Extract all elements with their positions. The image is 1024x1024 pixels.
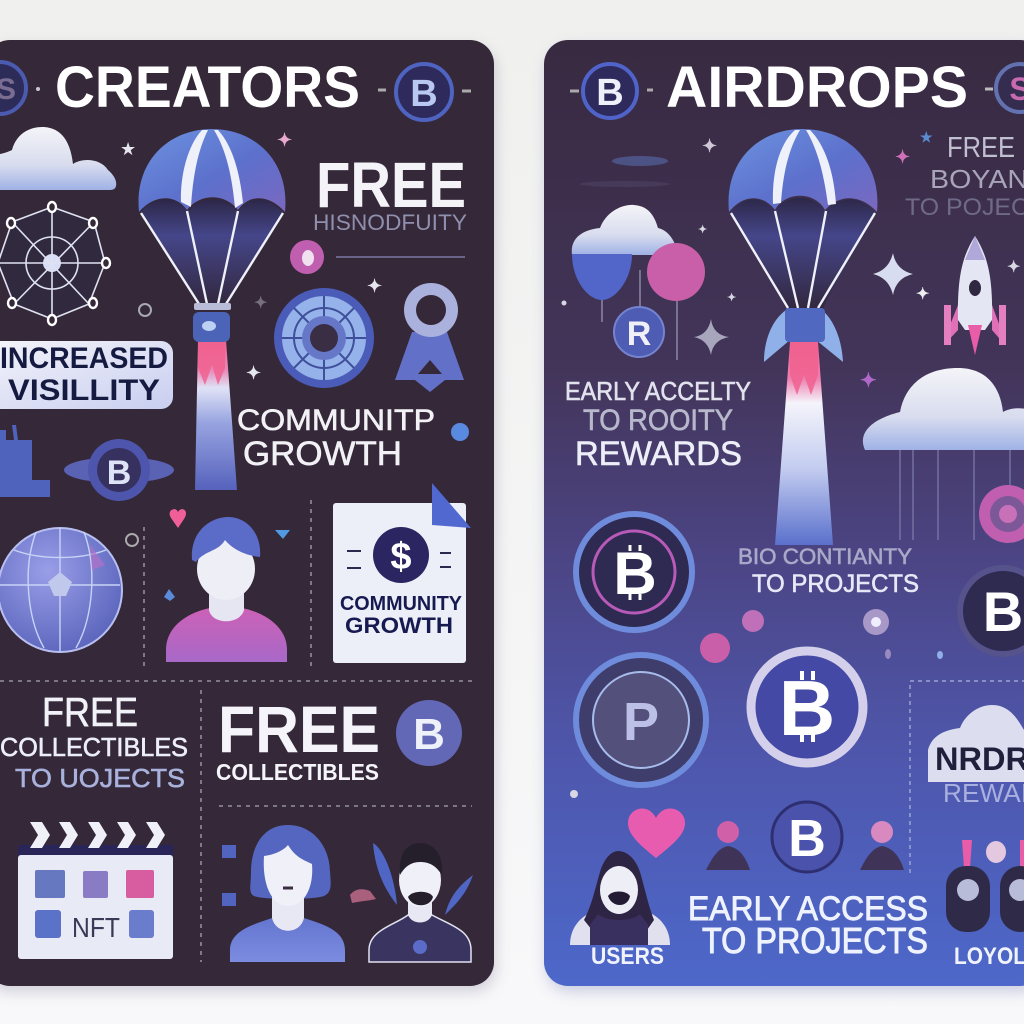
text: early access to rewards: EARLY ACCELTY <box>565 376 751 406</box>
decorative sparkles: airdrops: ✦ <box>1007 259 1020 276</box>
icon: cloud with balloons <box>572 205 705 360</box>
icon: coin left top <box>0 62 40 114</box>
icon: coin B top right panel <box>570 64 653 118</box>
text: community growth: GROWTH <box>243 435 402 473</box>
icon: planet coin: B <box>107 454 131 492</box>
icon: parachute airdrops <box>729 129 877 545</box>
icon: pawn left <box>706 821 750 870</box>
icon: pawn right <box>860 821 904 870</box>
dashed dividers: creators <box>0 500 474 962</box>
icon: star large <box>873 253 913 295</box>
text: bio community to projects <box>738 544 919 598</box>
text: free collectibles to projects: COLLECTIBLES <box>0 732 188 762</box>
tail <box>775 342 833 545</box>
icon: coin B top right panel: B <box>596 72 624 114</box>
icon: glass coin <box>576 655 706 785</box>
icon: coin small: R <box>627 315 651 353</box>
icon: pink circle <box>290 240 465 274</box>
icon: globe <box>0 528 122 652</box>
icon: coin bottom <box>772 802 842 872</box>
decorative sparkles: airdrops: ✦ <box>895 147 910 167</box>
text: free collectibles to projects: FREE <box>42 689 138 735</box>
icon: glass coin: P <box>623 692 659 752</box>
text: community growth <box>237 404 435 473</box>
decorative sparkles: airdrops: ✦ <box>702 136 717 156</box>
text: early access to projects: TO PROJECTS <box>702 920 928 961</box>
text: free boyan to project: BOYAN <box>930 164 1024 194</box>
text: early access to rewards: TO ROOITY <box>583 404 733 437</box>
icon: star <box>694 319 729 355</box>
dashed dividers: airdrops <box>910 681 1024 875</box>
panel: airdrops <box>544 40 1024 992</box>
text: free collectibles to projects <box>0 689 188 793</box>
callout: increased visibility <box>0 341 173 409</box>
text: bio community to projects: BIO CONTIANTY <box>738 544 912 569</box>
text: free headline: FREE <box>316 149 466 221</box>
icon: ribbon <box>395 283 464 392</box>
text: community growth: COMMUNITP <box>237 404 435 437</box>
decorative sparkles: creators: ✦ <box>254 295 267 312</box>
text: free boyan to project <box>905 132 1024 221</box>
title: creators: CREATORS <box>55 55 360 120</box>
label: users: USERS <box>591 943 664 970</box>
text: early access to projects <box>688 890 928 961</box>
text: free collectibles large: FREE <box>218 692 380 766</box>
text: early access to projects: EARLY ACCESS <box>688 890 928 928</box>
decorative sparkles: creators: ✦ <box>277 130 292 150</box>
icon: user long hair <box>570 851 670 945</box>
decorative sparkles: creators: ✦ <box>367 276 382 296</box>
icon: NFT window <box>18 822 173 959</box>
text: free boyan to project: FREE <box>947 132 1015 164</box>
icon: coin B solid: B <box>413 710 445 759</box>
icon: heart <box>628 809 685 858</box>
decorative sparkles: airdrops <box>562 129 1020 798</box>
icon: coin white ring: B <box>779 664 835 752</box>
title: airdrops: AIRDROPS <box>666 55 968 120</box>
panel: note community growth: GROWTH <box>345 613 453 638</box>
icon: coin small <box>614 307 664 357</box>
callout: increased visibility: VISILLITY <box>8 374 160 407</box>
icon: city silhouette <box>0 425 50 497</box>
icon: network <box>0 202 110 325</box>
small dots <box>700 609 943 663</box>
text: free boyan to project: TO POJEC <box>905 194 1024 221</box>
icon: pink spiral coin <box>979 485 1024 543</box>
text: bio community to projects: TO PROJECTS <box>752 570 919 598</box>
decorative sparkles: creators <box>120 130 469 546</box>
decorative sparkles: airdrops: ★ <box>920 129 933 145</box>
callout: increased visibility: INCREASED <box>0 342 168 375</box>
decorative sparkles: airdrops: ✦ <box>916 286 929 303</box>
faint text smudge <box>580 156 670 187</box>
decorative sparkles: airdrops: ✦ <box>698 224 707 236</box>
text: free collectibles to projects: TO UOJECTS <box>15 763 185 793</box>
icon: coin bottom: B <box>788 810 826 868</box>
panel: note community growth <box>333 483 471 663</box>
panel: creators <box>0 40 496 992</box>
icon: man <box>222 843 473 962</box>
icon: parachute creators <box>139 129 285 490</box>
text: early access to rewards <box>565 376 751 473</box>
icon: planet coin <box>64 439 174 501</box>
icon: coin right dark <box>960 568 1024 654</box>
text: early access to rewards: REWARDS <box>575 435 742 473</box>
icon: loyalty figures <box>946 840 1024 932</box>
icon: coin B top: B <box>410 73 438 115</box>
text: subline: HISNODFUITY <box>313 210 467 235</box>
icon: coin B solid <box>396 700 462 766</box>
callout: airdrop rewards <box>928 705 1024 808</box>
icon: coin white ring <box>751 651 863 763</box>
icon: coin pink ring: B <box>613 540 657 607</box>
panel: note community growth: COMMUNITY <box>340 593 463 615</box>
icon: coin B top <box>378 64 471 120</box>
decorative sparkles: airdrops: ✦ <box>727 292 736 304</box>
panel: note community growth: $ <box>390 536 412 578</box>
icon: coin pink top right <box>985 64 1024 112</box>
icon: person pink <box>164 509 290 662</box>
icon: cloud large with rain <box>863 368 1024 540</box>
tail <box>195 340 237 490</box>
decorative sparkles: airdrops: ✦ <box>860 370 877 392</box>
icon: woman <box>230 825 345 962</box>
icon: wheel <box>274 288 374 388</box>
icon: rocket <box>944 236 1006 355</box>
icon: NFT window: NFT <box>72 912 120 943</box>
decorative sparkles: creators: ✦ <box>246 363 261 383</box>
icon: coin pink ring <box>576 514 692 630</box>
decorative sparkles: creators: ★ <box>120 139 136 159</box>
icon: coin right dark: B <box>983 580 1023 643</box>
icon: cloud <box>0 127 116 190</box>
text: free collectibles large: COLLECTIBLES <box>216 759 379 785</box>
